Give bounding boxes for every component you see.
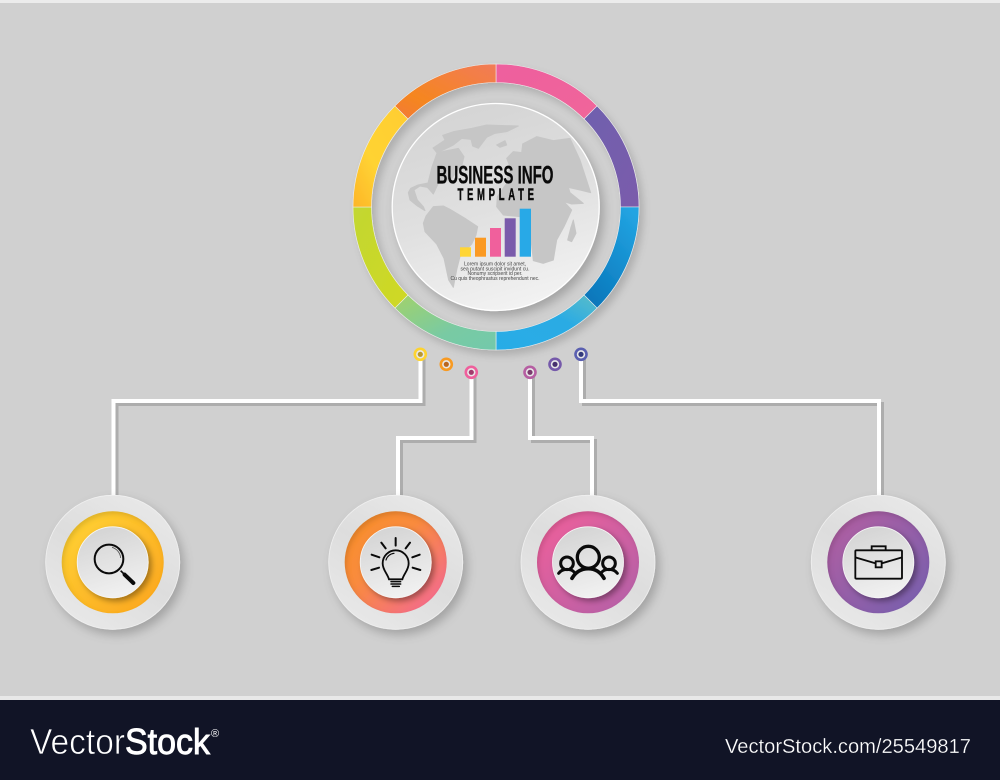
bar chart	[460, 209, 531, 257]
segment: orange	[395, 64, 496, 119]
logo wordmark: stock: Stock	[125, 721, 211, 762]
connector: search	[114, 354, 424, 496]
dot: yellow	[414, 348, 427, 361]
segment: pink	[496, 64, 597, 119]
badge: idea	[329, 495, 463, 629]
segment: green	[395, 295, 496, 350]
connector: team	[530, 372, 595, 496]
segment: purple	[584, 106, 639, 207]
badge: search	[46, 495, 180, 629]
segment: blue	[584, 207, 639, 308]
connector: business	[581, 354, 882, 496]
subheading: template: TEMPLATE	[458, 185, 538, 204]
connector: idea	[398, 372, 474, 496]
lorem text block: Nonumy scripserit id per.	[468, 271, 522, 277]
segment: lime	[353, 207, 408, 308]
segment: cyan	[496, 295, 597, 350]
footer band	[0, 696, 1000, 780]
central disc	[392, 104, 599, 310]
lorem text block: sea putant suscipit invidunt cu.	[460, 266, 530, 272]
icon: people	[559, 546, 617, 578]
connector lines	[114, 354, 882, 496]
dot: indigo	[574, 348, 588, 361]
world map	[408, 125, 591, 287]
badge: business	[811, 495, 945, 629]
registered mark: ®	[211, 728, 219, 740]
top light strip	[0, 0, 1000, 3]
heading: business info: BUSINESS INFO	[436, 162, 554, 190]
icon: magnifier	[95, 545, 133, 583]
dot: purple	[548, 358, 562, 371]
dot: orange	[440, 358, 453, 371]
icon: briefcase	[855, 546, 902, 579]
image id: VectorStock.com/25549817	[725, 736, 971, 758]
dot: magenta	[523, 366, 537, 379]
connector dots	[414, 348, 588, 379]
logo wordmark: vector: Vector	[30, 721, 125, 762]
lorem text block	[450, 262, 540, 282]
badge: team	[521, 495, 655, 629]
lorem text block: Lorem ipsum dolor sit amet,	[464, 262, 526, 268]
title	[436, 162, 554, 204]
icon: light bulb	[371, 538, 420, 586]
segmented colour ring	[353, 64, 639, 350]
segment: yellow	[353, 106, 408, 207]
dot: pink	[464, 366, 478, 379]
lorem text block: Cu quis theophrastus reprehendunt nec.	[450, 276, 540, 282]
